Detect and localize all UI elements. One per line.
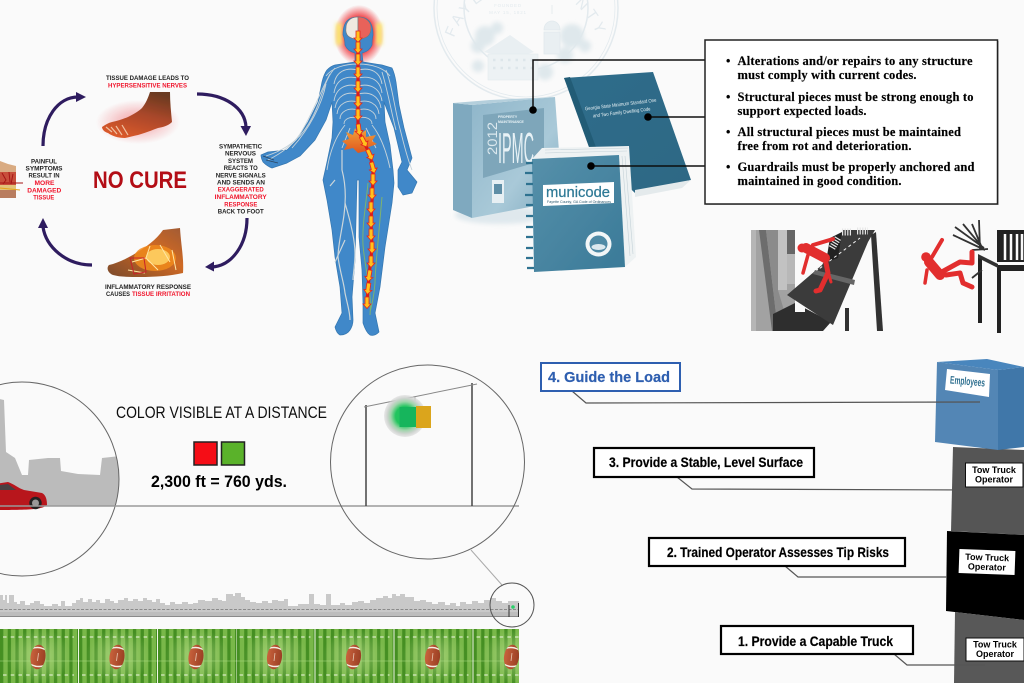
text: painful symptoms: PAINFUL (31, 158, 57, 166)
text: sympathetic nervous system: SYSTEM (228, 158, 253, 165)
swatches: red and green (194, 442, 244, 465)
step 2: trained operator: 2. Trained Operator Assesses Tip Risks (667, 544, 889, 560)
arrow: nervous system to inflammation (205, 218, 247, 272)
book: IPMC: IPMC (498, 124, 534, 173)
text: sympathetic nervous system: NERVOUS (225, 151, 257, 158)
callout: code requirements: must comply with current codes. (738, 68, 916, 82)
label: tow truck operator top (966, 463, 1023, 487)
illustration: collapsing stairs (751, 230, 883, 331)
text: inflammatory response: TISSUE IRRITATION (132, 291, 190, 298)
label: tow truck operator bottom (966, 638, 1024, 661)
callout: code requirements: • (726, 160, 730, 174)
watermark: county seal (433, 0, 619, 99)
callout: code requirements: • (726, 125, 730, 139)
distance label: 2,300 ft = 760 yds. (151, 472, 287, 491)
block: employees box (935, 359, 1024, 450)
spinal nerve pain path (354, 31, 378, 308)
book: IPMC (453, 97, 560, 224)
step 1: capable truck (721, 626, 913, 654)
step 2: trained operator (649, 538, 905, 566)
panel: load stack (541, 359, 1024, 683)
body silhouette (261, 17, 417, 335)
label: tow truck operator middle (959, 549, 1015, 575)
panel: no cure cycle (0, 75, 267, 298)
ground line (0, 505, 519, 507)
right magnifier circle with signal (330, 365, 524, 559)
text: tissue damage (106, 75, 189, 90)
label: tow truck operator middle: Tow Truck (965, 552, 1010, 563)
step 4: guide the load (541, 363, 680, 391)
callout: code requirements: free from rot and deterioration. (738, 139, 912, 153)
brain (346, 17, 371, 39)
label: tow truck operator bottom: Tow Truck (973, 640, 1018, 650)
arrow: inflammation to symptoms (38, 218, 92, 265)
text: sympathetic nervous system: INFLAMMATORY (215, 194, 267, 201)
callout: code requirements: All structural pieces must be maintained (738, 125, 961, 139)
ribs and nerves (263, 64, 412, 170)
text: sympathetic nervous system: BACK TO FOOT (218, 209, 264, 216)
head glow (334, 5, 384, 65)
figure: falling person (921, 240, 972, 287)
block: employees box: Employees (950, 375, 985, 390)
block: black operator (946, 531, 1024, 620)
book: municode: municode (546, 184, 610, 201)
callout: code requirements: maintained in good condition. (738, 174, 902, 188)
label: tow truck operator bottom: Operator (976, 649, 1014, 659)
text: sympathetic nervous system: NERVE SIGNALS (216, 172, 266, 179)
callout: code requirements (705, 40, 999, 205)
panel: nervous system figure (261, 5, 417, 335)
figure: falling person on stairs (798, 239, 833, 291)
text: sympathetic nervous system: AND SENDS AN (217, 180, 265, 187)
icon: damaged skin tissue (0, 161, 23, 198)
block: gray truck (954, 612, 1024, 683)
step 4: guide the load: 4. Guide the Load (548, 369, 670, 386)
text: painful symptoms: SYMPTOMS (26, 166, 63, 173)
text: painful symptoms: DAMAGED (27, 187, 62, 194)
car (0, 482, 47, 510)
text: sympathetic nervous system: RESPONSE (224, 201, 258, 208)
callout leader lines (529, 60, 705, 170)
text: painful symptoms: TISSUE (33, 195, 55, 202)
heading: color visible: COLOR VISIBLE AT A DISTANCE (116, 403, 327, 422)
book: municode: Fayette County, GA Code of Ordinances (547, 200, 611, 204)
book: Georgia dwelling code: Georgia State Minimum Standard One (585, 98, 657, 112)
panel: code books (453, 72, 691, 272)
text: painful symptoms: MORE (34, 180, 55, 187)
icon: red foot (96, 92, 180, 144)
arrow: symptoms to tissue damage (43, 92, 86, 146)
step 3: stable surface: 3. Provide a Stable, Level Surface (609, 454, 803, 470)
text: inflammatory response (105, 284, 192, 298)
callout: code requirements: Alterations and/or repairs to any structure (738, 54, 973, 68)
book: IPMC: 2012 (484, 122, 500, 155)
broken rail pieces (953, 220, 988, 278)
text: sympathetic nervous system: REACTS TO (224, 165, 258, 172)
book: municode (525, 146, 636, 272)
label: tow truck operator middle: Operator (968, 561, 1006, 573)
yellow heat glow (336, 23, 382, 45)
text: sympathetic nervous system (215, 143, 267, 216)
text: inflammatory response: INFLAMMATORY RESPONSE (105, 284, 192, 291)
book: IPMC: PROPERTY (498, 115, 518, 119)
small magnifier (490, 583, 534, 627)
sciatic nerve branches (363, 183, 382, 315)
watermark: county seal: MAY 15, 1821 (489, 10, 527, 15)
watermark: county seal: FOUNDED (494, 3, 522, 8)
book: Georgia dwelling code: and Two Family Dwelling Code (593, 106, 651, 119)
callout: code requirements: support expected loads. (738, 104, 866, 118)
panel: distance diagram (0, 365, 553, 683)
text: tissue damage: HYPERSENSITIVE NERVES (108, 82, 188, 90)
label: tow truck operator top: Operator (975, 474, 1013, 484)
icon: inflamed foot (108, 228, 183, 277)
callout: code requirements: • (726, 90, 730, 104)
callout: code requirements: • (726, 54, 730, 68)
label: tow truck operator top: Tow Truck (972, 465, 1017, 475)
distant skyline strip (0, 593, 519, 617)
leader lines (572, 391, 985, 665)
text: painful symptoms: RESULT IN (28, 173, 60, 180)
book: IPMC: MAINTENANCE (498, 120, 525, 124)
heading: no cure: NO CURE (93, 167, 187, 194)
text: sympathetic nervous system: EXAGGERATED (218, 187, 264, 194)
illustration: falling from broken railing (921, 220, 1024, 333)
book: Georgia dwelling code (564, 72, 691, 197)
text: inflammatory response: CAUSES (106, 291, 131, 298)
step 3: stable surface (594, 448, 814, 477)
pelvic nerve burst (342, 128, 377, 153)
football field strip (0, 629, 553, 683)
callout: code requirements: Guardrails must be properly anchored and (738, 160, 975, 174)
step 1: capable truck: 1. Provide a Capable Truck (738, 633, 893, 649)
left magnifier circle (0, 382, 125, 576)
zoom connector (471, 550, 502, 585)
callout: code requirements: Structural pieces must be strong enough to (738, 90, 974, 104)
text: sympathetic nervous system: SYMPATHETIC (219, 143, 262, 150)
text: painful symptoms (26, 158, 63, 202)
arrow: foot to nervous system (197, 94, 251, 136)
text: tissue damage: TISSUE DAMAGE LEADS TO (106, 75, 189, 82)
block: gray operator (951, 447, 1024, 535)
left leg nerves (330, 150, 355, 320)
